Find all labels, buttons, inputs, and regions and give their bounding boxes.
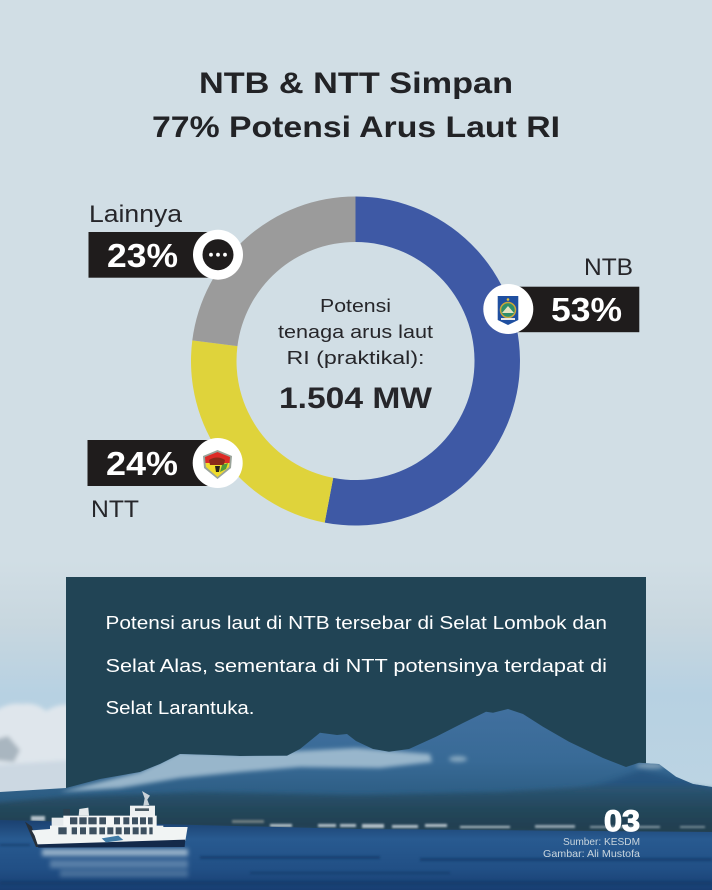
ferry — [25, 791, 188, 848]
callout: NTB 53%: NTB — [584, 254, 633, 281]
callout: NTB 53%: 53% — [551, 291, 622, 328]
donut centre text: RI (praktikal): — [286, 348, 424, 368]
clouds at left edge — [0, 704, 72, 795]
segment: NTT 24% — [191, 340, 333, 523]
donut chart — [191, 196, 520, 526]
mountain range photo — [0, 700, 712, 835]
page number and credits: 03 — [604, 805, 640, 838]
mast — [142, 791, 150, 806]
callout: Lainnya 23%: 23% — [107, 237, 178, 274]
text panel — [66, 577, 646, 802]
title: 77% Potensi Arus Laut RI — [152, 111, 560, 144]
sea ripples — [0, 844, 712, 885]
callout: Lainnya 23% — [88, 201, 243, 280]
icon: NTT emblem — [203, 450, 232, 479]
panel body text: Selat Larantuka. — [106, 698, 254, 718]
panel body text — [106, 613, 607, 718]
callout: NTT 24%: NTT — [91, 496, 139, 523]
panel body text: Selat Alas, sementara di NTT potensinya terdapat di — [106, 656, 607, 676]
donut centre text — [278, 296, 433, 415]
callout: NTT 24% — [88, 438, 243, 523]
donut centre text: 1.504 MW — [279, 382, 433, 415]
segment: NTB 53% — [325, 196, 520, 526]
donut centre text: tenaga arus laut — [278, 322, 433, 342]
sea — [0, 820, 712, 890]
cloud band across the mountains — [60, 748, 664, 792]
forested shoreline — [0, 786, 712, 835]
source credit — [543, 836, 640, 860]
page number and credits — [543, 805, 640, 860]
title — [152, 67, 560, 144]
darker eastern flank — [606, 768, 711, 788]
title: NTB & NTT Simpan — [199, 67, 513, 100]
segment: Lainnya 23% — [192, 196, 356, 346]
source credit: Sumber: KESDM — [563, 836, 640, 848]
callout: NTB 53% — [483, 254, 639, 334]
icon: three dots — [202, 239, 234, 270]
ferry reflection — [42, 849, 188, 877]
source credit: Gambar: Ali Mustofa — [543, 848, 640, 860]
donut centre text: Potensi — [320, 296, 391, 316]
panel body text: Potensi arus laut di NTB tersebar di Selat Lombok dan — [106, 613, 607, 633]
callout: Lainnya 23%: Lainnya — [89, 201, 183, 228]
harbour buildings on the shore — [31, 816, 705, 828]
icon: NTB emblem — [498, 296, 518, 325]
callout: NTT 24%: 24% — [106, 445, 178, 482]
